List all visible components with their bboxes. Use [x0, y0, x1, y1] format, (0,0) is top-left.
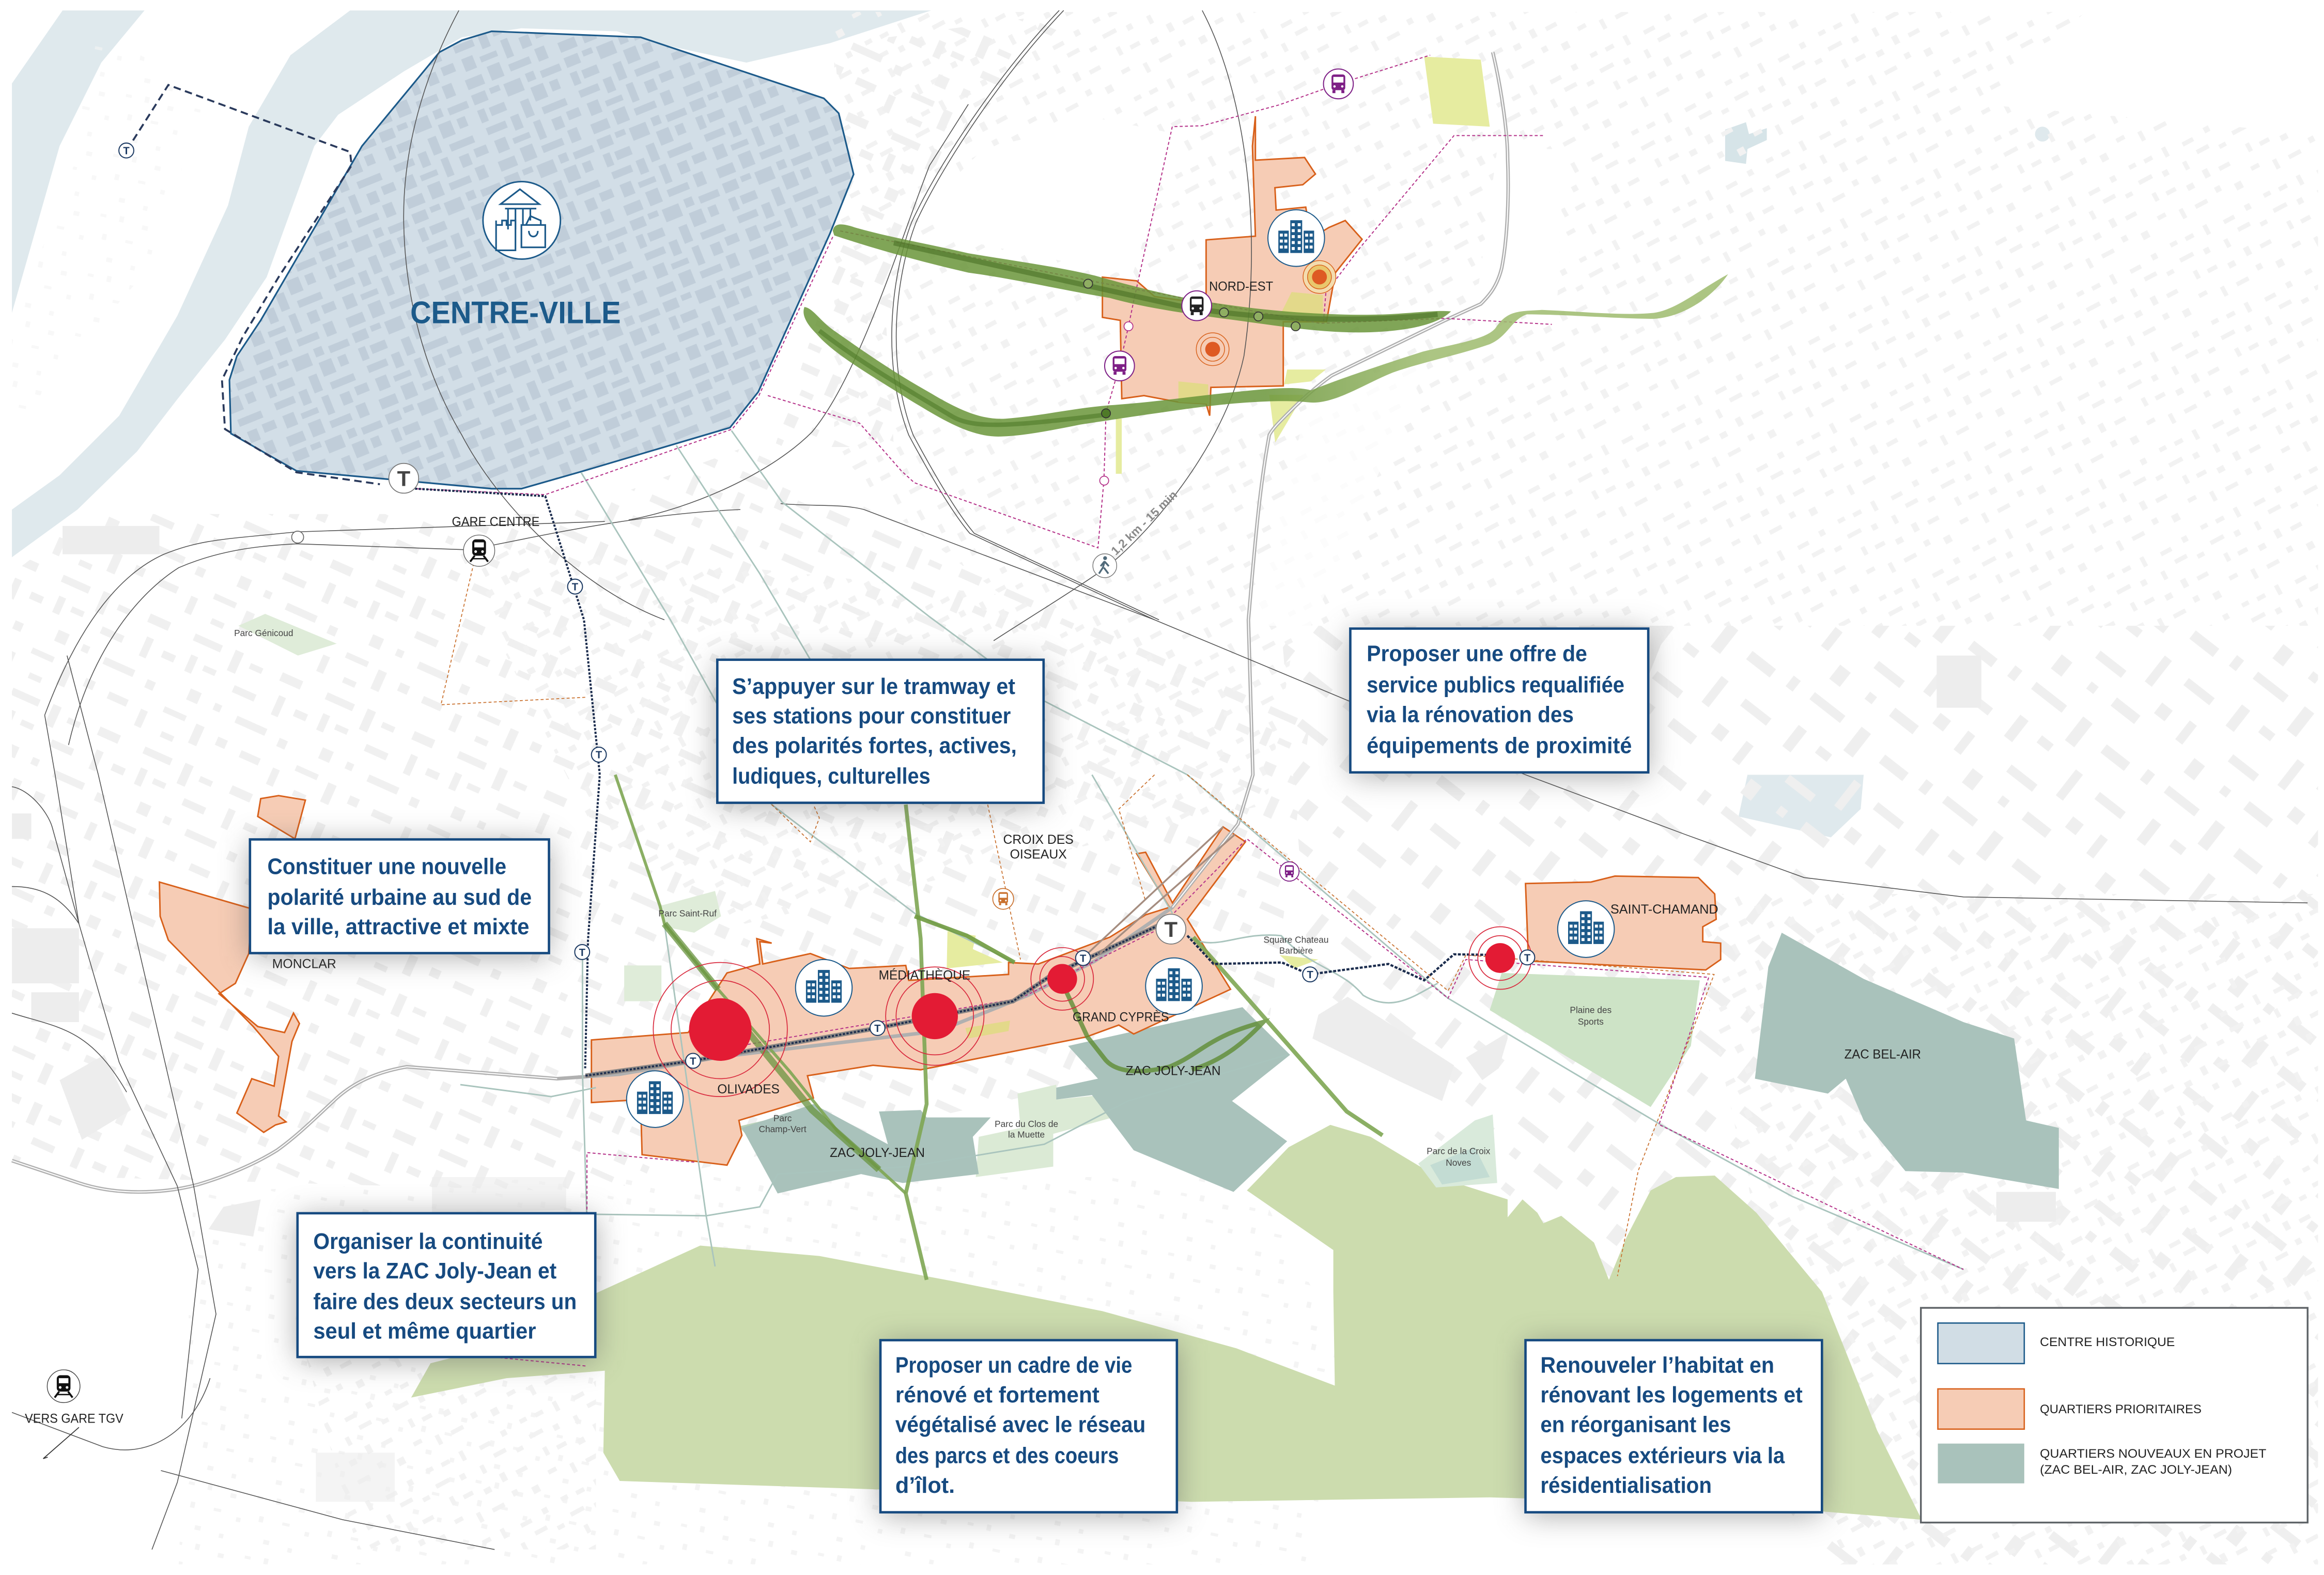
polarity: Olivades [653, 963, 787, 1097]
callout: Organiser la continuité: faire des deux secteurs un [313, 1289, 577, 1314]
roads [12, 52, 1508, 1192]
callout: Proposer un cadre de vie: Proposer un cadre de vie [895, 1353, 1132, 1378]
polarity: Médiathèque [886, 967, 984, 1066]
pink dashed bus routes [415, 55, 1963, 1366]
callout: Constituer une nouvelle polarité: Constituer une nouvelle [268, 855, 506, 879]
large buildings [12, 526, 2056, 1502]
place labels: ZAC JOLY-JEAN [830, 1146, 925, 1160]
callout: Organiser la continuité: Organiser la continuité [313, 1229, 543, 1254]
tram stops [119, 143, 1535, 1068]
arrow: towards TGV station [43, 1427, 79, 1459]
callout: Constituer une nouvelle polarité: la ville, attractive et mixte [268, 915, 529, 939]
panel: ZAC Joly-Jean and ZAC Bel-Air [742, 933, 2059, 1194]
callout: Proposer une offre [1350, 628, 1648, 776]
callout: Proposer une offre: équipements de proximité [1367, 734, 1632, 759]
place labels: VERS GARE TGV [25, 1412, 123, 1426]
place labels: NORD-EST [1209, 280, 1273, 294]
tram stops: T [1165, 917, 1178, 941]
tram stops: T [596, 750, 602, 761]
title: centre-ville: CENTRE-VILLE [410, 295, 621, 330]
legend [1921, 1308, 2307, 1522]
place labels: Parc de la Croix [1427, 1146, 1491, 1156]
tram stops: T [1524, 952, 1531, 964]
callout: Organiser la continuité: vers la ZAC Joly-Jean et [313, 1259, 556, 1284]
place labels: OISEAUX [1010, 848, 1067, 862]
tram stops: T [1307, 969, 1313, 981]
place labels [25, 280, 1921, 1426]
callout: Organiser la continuité [298, 1213, 595, 1360]
legend: CENTRE HISTORIQUE [2040, 1335, 2175, 1349]
panel: centre-ville [229, 32, 854, 489]
tram stops: T [123, 146, 130, 157]
yellow patches inside quartiers [965, 292, 1323, 1039]
tram stops: T [690, 1056, 696, 1067]
place labels: Square Chateau [1264, 934, 1328, 945]
callout: Renouveler l'habitat: Renouveler l’habitat en [1540, 1353, 1774, 1378]
route stops [292, 279, 1300, 543]
icon: trains [47, 535, 495, 1402]
place labels: la Muette [1008, 1130, 1045, 1140]
place labels: Champ-Vert [758, 1124, 807, 1134]
callout: S'appuyer sur le tramway [717, 660, 1044, 806]
callout: Renouveler l'habitat: espaces extérieurs via la [1540, 1443, 1785, 1468]
light green squares and gardens [238, 614, 1700, 1187]
panel: quartiers prioritaires [160, 116, 1721, 1165]
callout: Renouveler l'habitat: résidentialisation [1540, 1473, 1712, 1498]
icon: buses [1105, 69, 1353, 881]
place labels: GARE CENTRE [452, 515, 539, 529]
teal streams [460, 430, 1963, 1270]
legend: QUARTIERS NOUVEAUX EN PROJET [2040, 1447, 2267, 1461]
place labels: SAINT-CHAMAND [1610, 903, 1718, 917]
callout: Constituer une nouvelle polarité: polarité urbaine au sud de [268, 885, 532, 910]
place labels: Barbière [1279, 945, 1313, 955]
icon: neighbourhood buildings [627, 210, 1614, 1128]
place labels: ZAC JOLY-JEAN [1126, 1064, 1221, 1078]
place labels: Parc Saint-Ruf [658, 908, 717, 918]
callout: Renouveler l'habitat [1526, 1340, 1822, 1515]
orange dashed routes [441, 563, 1714, 1276]
place labels: Sports [1578, 1016, 1604, 1027]
place labels: Parc du Clos de [995, 1119, 1058, 1129]
callout: Proposer une offre: via la rénovation des [1367, 702, 1574, 727]
place labels: GRAND CYPRÈS [1073, 1011, 1169, 1025]
tram stops: T [1080, 953, 1087, 964]
tram stops: T [579, 947, 586, 959]
icon: orange bus [993, 888, 1014, 909]
place labels: Parc Génicoud [234, 628, 293, 638]
callout: Proposer un cadre de vie [880, 1340, 1177, 1515]
callout: Constituer une nouvelle polarité [250, 839, 549, 956]
large parks [411, 1125, 1922, 1520]
place labels: Plaine des [1570, 1005, 1612, 1015]
callout: Proposer un cadre de vie: des parcs et des coeurs [895, 1443, 1119, 1468]
place labels: OLIVADES [717, 1083, 780, 1097]
callout: Renouveler l'habitat: rénovant les logements et [1540, 1383, 1803, 1408]
yellow-green squares [947, 57, 1490, 968]
callout: S'appuyer sur le tramway: ludiques, culturelles [732, 764, 931, 789]
tram line [127, 85, 1500, 1076]
green corridors [615, 224, 1728, 1280]
legend: (ZAC BEL-AIR, ZAC JOLY-JEAN) [2040, 1463, 2232, 1477]
icon: centre-ville monument [483, 181, 561, 259]
callout: Proposer une offre: service publics requalifiée [1367, 673, 1624, 698]
icon: walker [1093, 554, 1117, 578]
place labels: ZAC BEL-AIR [1845, 1048, 1921, 1062]
place labels: Parc [773, 1113, 792, 1123]
callout: Renouveler l'habitat: en réorganisant les [1540, 1412, 1731, 1437]
place labels: MONCLAR [272, 957, 336, 971]
place labels: Noves [1446, 1157, 1471, 1168]
tram stops: T [874, 1023, 881, 1034]
callout: S'appuyer sur le tramway: S’appuyer sur le tramway et [732, 674, 1015, 699]
callout: Proposer un cadre de vie: d’îlot. [895, 1473, 955, 1498]
place labels: MÉDIATHÈQUE [879, 969, 970, 983]
callout: Proposer un cadre de vie: végétalisé avec le réseau [895, 1412, 1145, 1437]
callout: Proposer une offre: Proposer une offre de [1367, 642, 1587, 667]
callout: Proposer un cadre de vie: rénové et fortement [895, 1383, 1099, 1408]
tram stops: T [572, 582, 579, 593]
polarities: Nord-Est [1196, 260, 1336, 366]
polarity: Grand Cyprès [1031, 948, 1093, 1010]
river Rhône [12, 10, 2050, 837]
walk distance label: 1,2 km - 15 min [1108, 488, 1180, 558]
tram stops: T [397, 467, 411, 491]
callout: Organiser la continuité: seul et même quartier [313, 1319, 536, 1344]
callout: S'appuyer sur le tramway: des polarités fortes, actives, [732, 734, 1017, 759]
callout: S'appuyer sur le tramway: ses stations pour constituer [732, 704, 1011, 729]
polarity: Saint-Chamand [1469, 927, 1531, 990]
place labels: CROIX DES [1003, 833, 1074, 847]
legend: QUARTIERS PRIORITAIRES [2040, 1402, 2202, 1416]
